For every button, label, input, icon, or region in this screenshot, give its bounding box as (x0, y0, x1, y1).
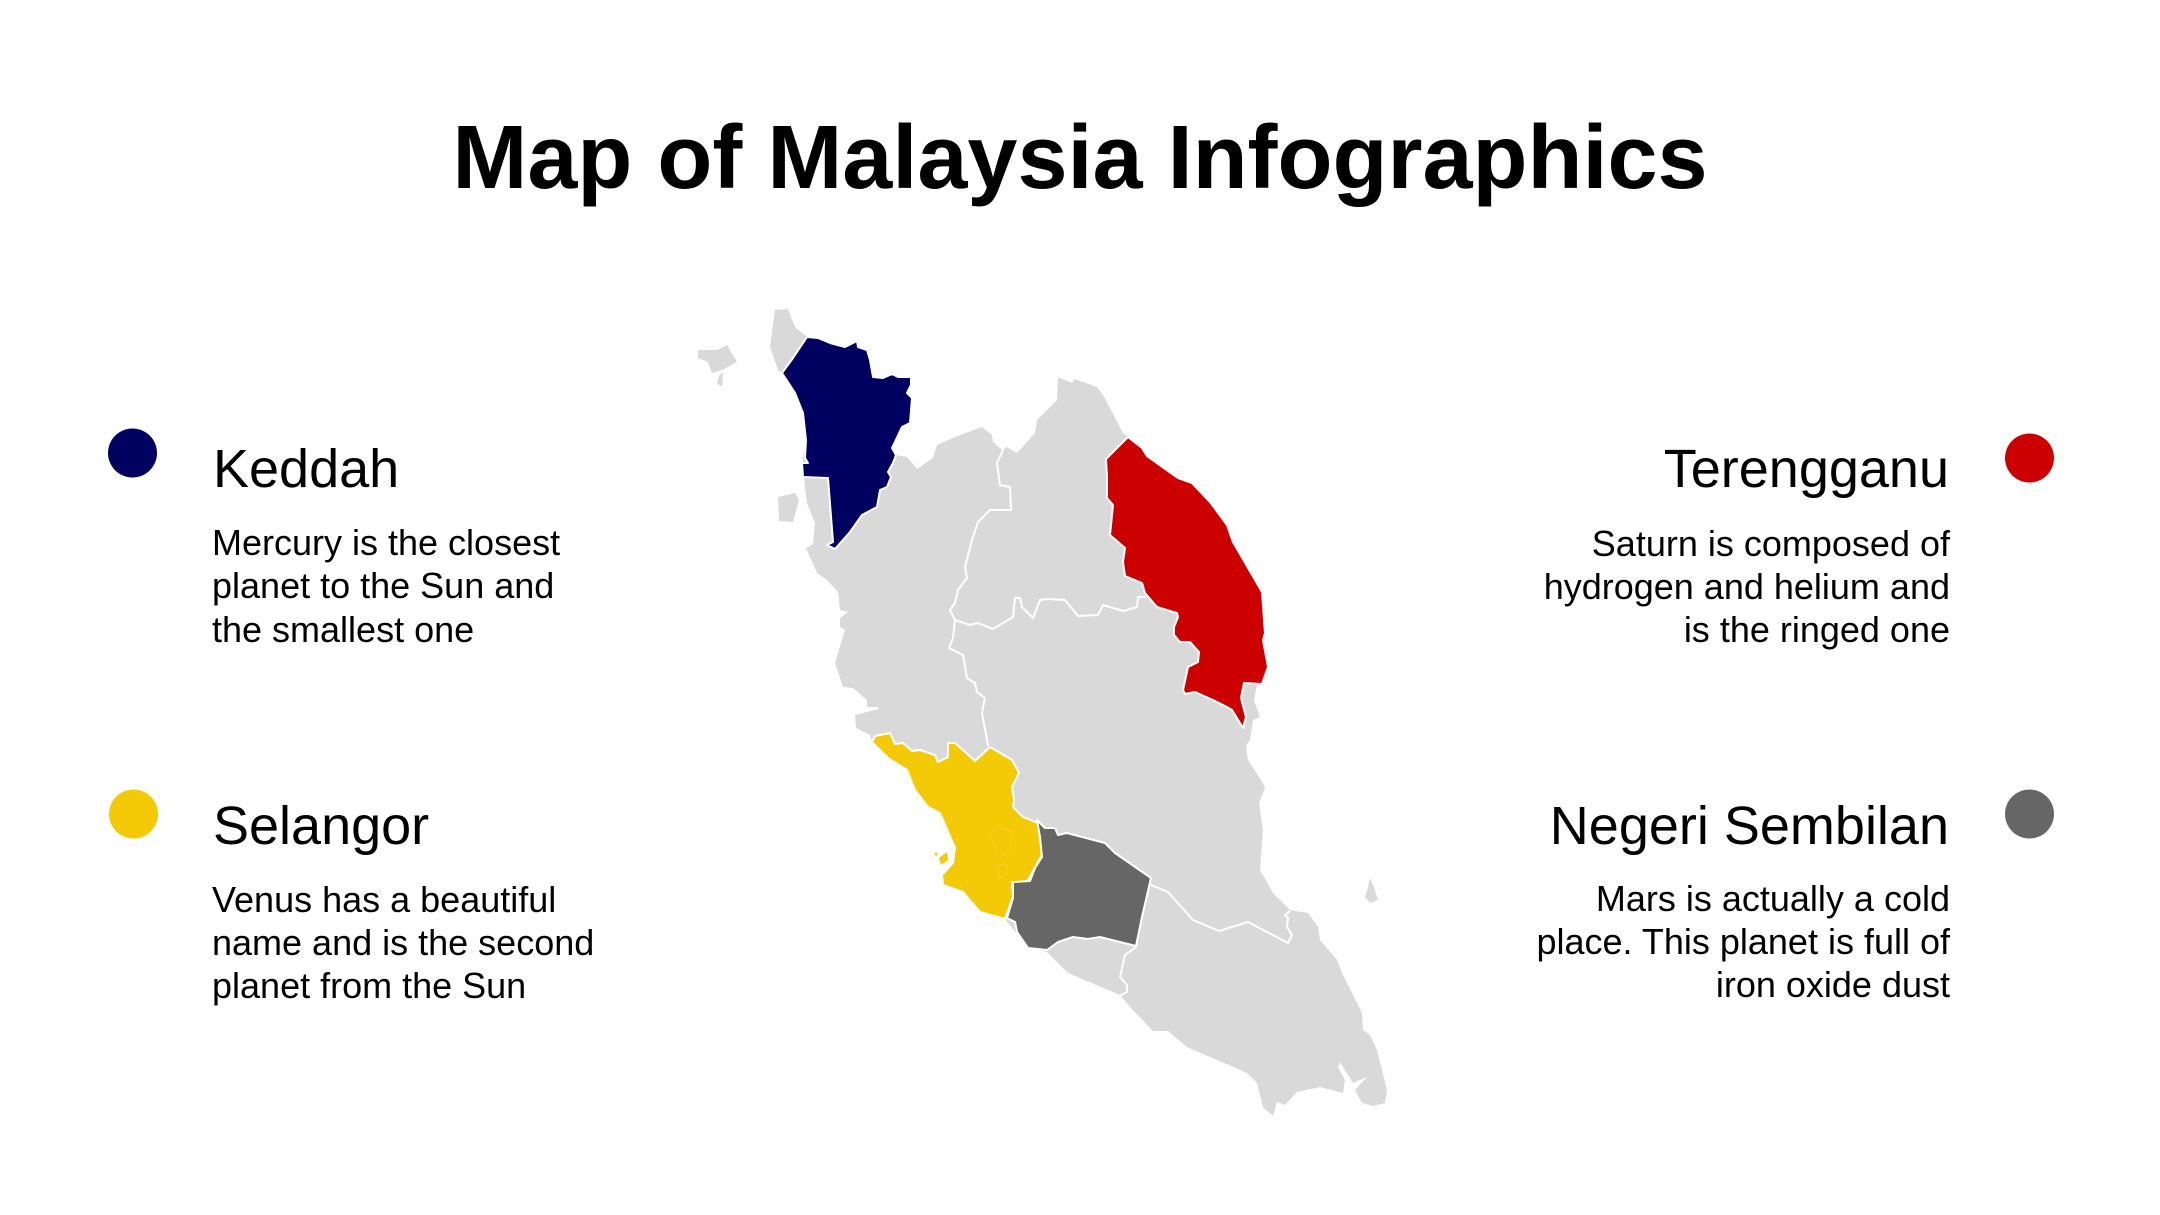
map: grey peninsula base (770, 309, 1387, 1116)
map: state borders (949, 450, 1292, 995)
icon: Negeri Sembilan colour dot (2005, 790, 2054, 838)
text: Keddah description: planet to the Sun and (212, 565, 554, 606)
map: Langkawi islands (698, 345, 737, 387)
map: Tioman island (1365, 878, 1378, 903)
text: Selangor description: Venus has a beautiful (212, 879, 556, 920)
text: Terengganu description: hydrogen and helium and (1544, 566, 1950, 607)
icon: Keddah colour dot (108, 428, 157, 478)
heading: Terengganu: Terengganu (1664, 439, 1949, 499)
text: Keddah description: the smallest one (212, 609, 474, 650)
map: Selangor state (872, 733, 1042, 919)
text: Terengganu description: is the ringed one (1684, 609, 1950, 650)
text: Terengganu description: Saturn is composed of (1592, 523, 1951, 564)
text: Negeri Sembilan description: Mars is actually a cold (1596, 878, 1950, 919)
text: Keddah description: Mercury is the closest (212, 522, 560, 563)
legend item: Negeri Sembilan (1536, 790, 2054, 1005)
heading: Negeri Sembilan: Negeri Sembilan (1550, 796, 1949, 856)
title: Map of Malaysia Infographics (452, 108, 1708, 208)
icon: Terengganu colour dot (2005, 434, 2054, 482)
text: Selangor description: name and is the second (212, 922, 594, 963)
legend item: Terengganu (1544, 434, 2054, 650)
map of peninsular Malaysia (698, 309, 1387, 1116)
legend item: Selangor (109, 790, 594, 1006)
map: Keddah state (782, 337, 912, 549)
map: Terengganu state (1106, 437, 1268, 728)
text: Selangor description: planet from the Sun (212, 965, 526, 1006)
icon: Selangor colour dot (109, 790, 158, 838)
heading: Keddah: Keddah (213, 439, 399, 499)
map: Negeri Sembilan state (1007, 820, 1151, 950)
heading: Selangor: Selangor (213, 796, 429, 856)
text: Negeri Sembilan description: iron oxide dust (1716, 964, 1950, 1005)
text: Negeri Sembilan description: place. This planet is full of (1536, 921, 1951, 962)
legend item: Keddah (108, 428, 560, 650)
map: Penang island (778, 493, 799, 522)
